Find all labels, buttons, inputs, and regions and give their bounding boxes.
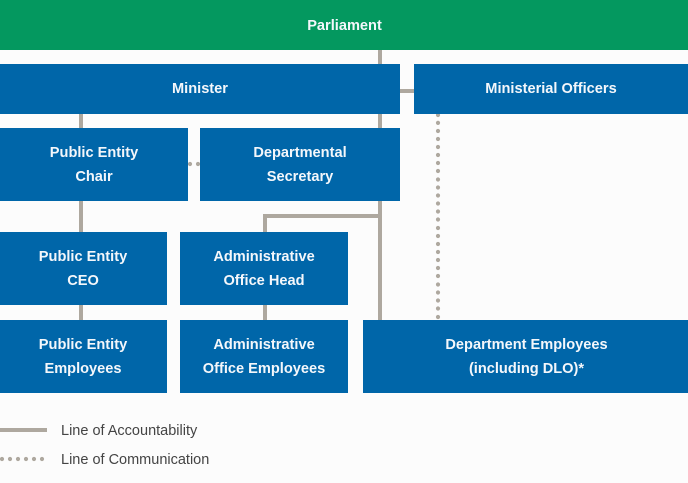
legend: [0, 423, 209, 468]
box: Public Entity Employees: Employees: [44, 361, 122, 377]
box: Public Entity Employees: Public Entity: [39, 337, 127, 353]
box: Ministerial Officers: [414, 64, 688, 114]
box: Public Entity CEO: Public Entity: [39, 249, 127, 265]
box: Departmental Secretary: Secretary: [267, 169, 333, 185]
box: Administrative Office Employees: Administrative: [213, 337, 315, 353]
box: Minister: Minister: [172, 81, 228, 97]
box: Parliament: Parliament: [307, 18, 382, 34]
legend: line of communication label: Line of Communication: [61, 452, 209, 468]
box: Public Entity CEO: [0, 232, 167, 305]
box: Public Entity Employees: [0, 320, 167, 393]
box: Department Employees: Department Employees: [445, 337, 608, 353]
box: Public Entity CEO: CEO: [67, 273, 99, 289]
box: Administrative Office Employees: [180, 320, 348, 393]
box: Department Employees: [363, 320, 688, 393]
box: Public Entity Chair: [0, 128, 188, 201]
legend: line of accountability swatch: [0, 428, 47, 432]
box: Administrative Office Head: Office Head: [223, 273, 305, 289]
box: Public Entity Chair: Public Entity: [50, 145, 138, 161]
box: Administrative Office Employees: Office Employees: [203, 361, 325, 377]
box: Minister: [0, 64, 400, 114]
box: Ministerial Officers: Ministerial Officers: [485, 81, 617, 97]
legend: line of communication swatch: [0, 456, 44, 462]
box: Department Employees: (including DLO)*: [469, 361, 584, 377]
box: Public Entity Chair: Chair: [75, 169, 113, 185]
legend: line of accountability label: Line of Accountability: [61, 423, 197, 439]
box: Parliament: [0, 0, 688, 50]
box: Administrative Office Head: Administrative: [213, 249, 315, 265]
box: Administrative Office Head: [180, 232, 348, 305]
box: Departmental Secretary: Departmental: [253, 145, 347, 161]
box: Departmental Secretary: [200, 128, 400, 201]
